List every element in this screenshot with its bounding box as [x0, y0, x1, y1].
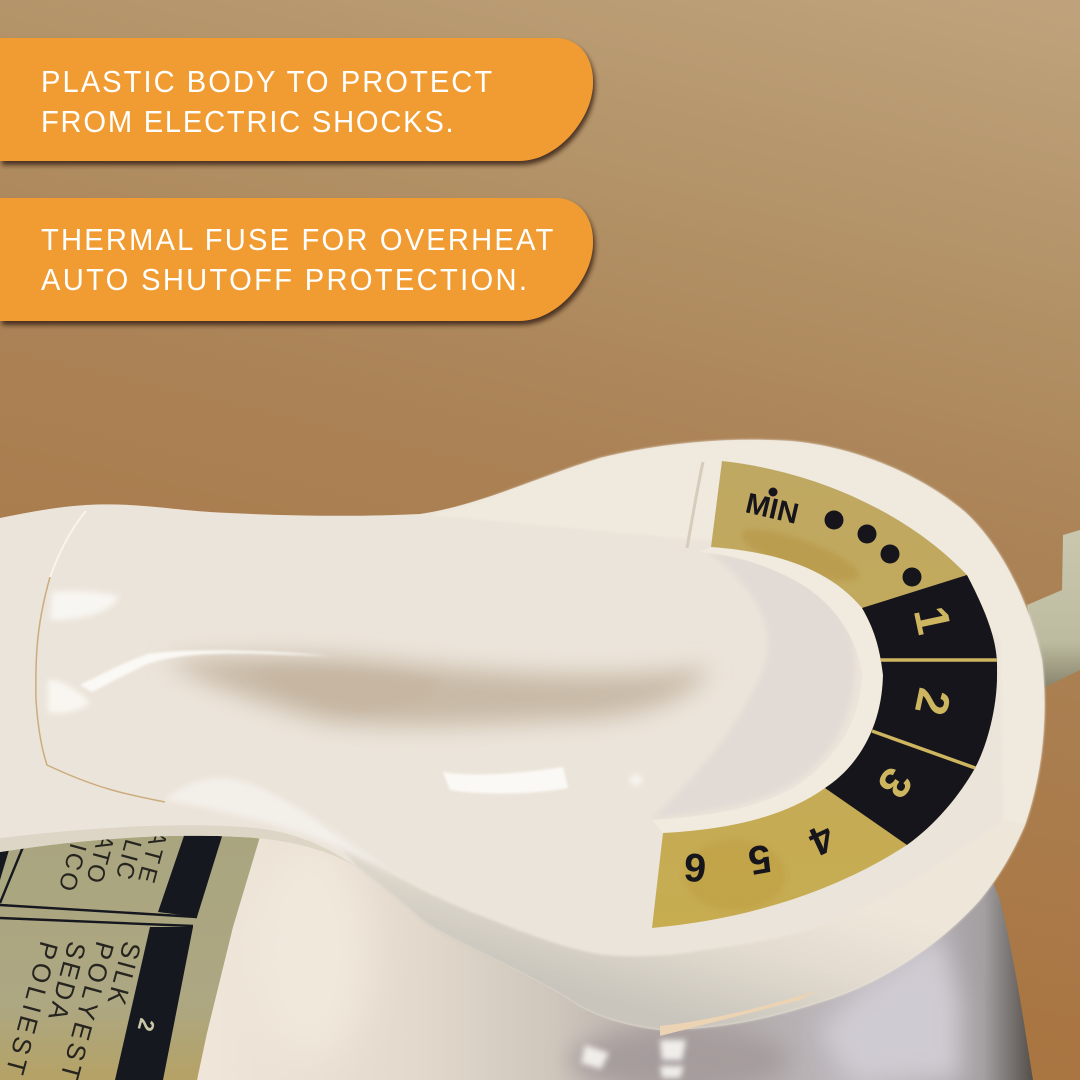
MIN label: MIN: [743, 488, 802, 531]
setting number 2 on label: 2: [133, 1016, 160, 1034]
settings numbers: 5: [745, 835, 775, 883]
callout text: FROM ELECTRIC SHOCKS.: [41, 105, 454, 139]
callout text: THERMAL FUSE FOR OVERHEAT: [41, 223, 553, 257]
settings numbers: [682, 602, 961, 890]
fabric names: lower group: SEDA: [42, 938, 92, 1024]
black segment for settings 1 to 3: [825, 575, 998, 845]
handle highlight: upper left: [50, 591, 119, 620]
callout banner: [0, 198, 593, 321]
fabric names: upper group: ICO: [53, 840, 91, 894]
fabric setting label on the soleplate: [0, 826, 262, 1080]
white ridge beside handle: [165, 778, 425, 900]
temperature dial ring: [652, 461, 1020, 928]
iron power connector: [1027, 530, 1080, 688]
collar seam at left: [36, 577, 165, 802]
lip above fabric label: [0, 825, 357, 867]
callout: plastic body: [0, 38, 593, 161]
callout text: [41, 65, 492, 139]
handle shadow groove: [165, 656, 710, 725]
callout text: PLASTIC BODY TO PROTECT: [41, 65, 492, 99]
shoulder seam above dial: [687, 462, 703, 548]
stains on gold band: [688, 530, 998, 907]
shell silhouette: [0, 440, 1045, 1030]
iron top shell with handle and dial: [0, 440, 1045, 1036]
settings numbers: 4: [802, 814, 841, 864]
gold dial band: [652, 461, 997, 928]
recess behind handle: [653, 552, 855, 818]
upper collar lightening: [430, 440, 1045, 825]
handle highlight: ridge line: [80, 650, 330, 692]
fabric names: lower group: SILK: [101, 938, 147, 1009]
black corner bar: [0, 840, 12, 880]
handle highlight: lower glare: [443, 767, 568, 794]
fabric names: upper group: ATO: [80, 830, 119, 886]
iron lower body: [190, 820, 1040, 1080]
fabric names: lower group: [0, 938, 147, 1080]
black setting bar: upper: [158, 830, 224, 917]
minimum dots: [768, 488, 922, 586]
settings numbers: 2: [905, 684, 961, 720]
callout: thermal fuse: [0, 198, 593, 321]
fabric names: upper group: LIC: [110, 836, 146, 882]
fabric names: upper group: ATE: [132, 826, 172, 886]
black setting bar: lower: [115, 927, 193, 1080]
fabric names: lower group: POLYEST: [54, 938, 120, 1080]
lower rim band: [318, 820, 1025, 1030]
settings numbers: 1: [903, 602, 960, 639]
bezel ring around the dial opening: [652, 547, 883, 833]
callout text: AUTO SHUTOFF PROTECTION.: [41, 263, 527, 297]
callout text: [41, 223, 553, 297]
fabric names: upper group: [53, 826, 172, 894]
callout banner: [0, 38, 593, 161]
orange seam under the rim: [660, 990, 820, 1036]
settings numbers: 6: [682, 844, 708, 890]
settings numbers: 3: [867, 759, 922, 807]
fabric names: lower group: POLIEST: [0, 938, 64, 1078]
